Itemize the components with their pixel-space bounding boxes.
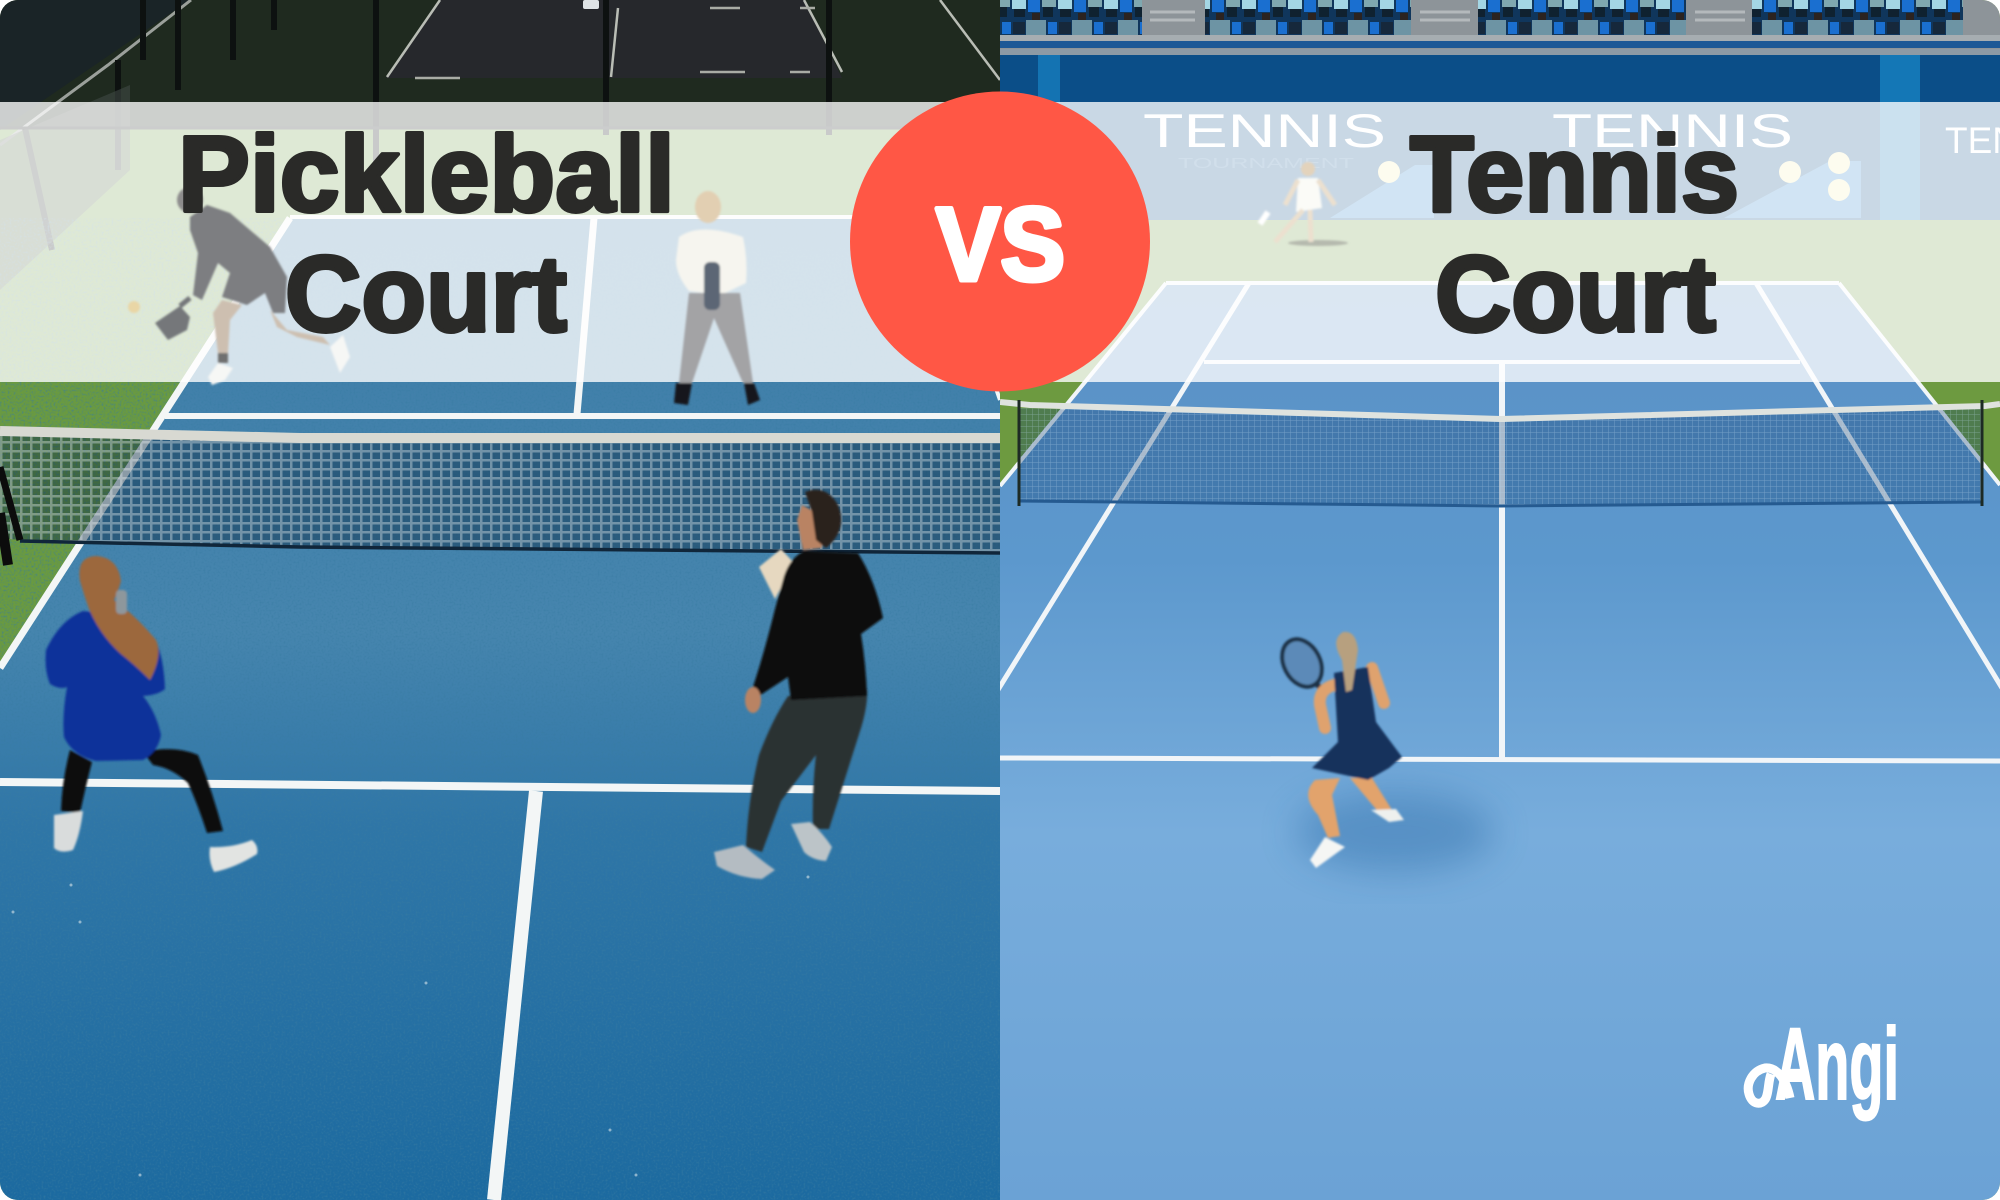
surface specks: [12, 876, 810, 1176]
pickleball net: [0, 431, 1000, 565]
VS badge: [850, 92, 1150, 392]
VS badge: VS: [936, 187, 1065, 303]
Angi logo: Angi: [1775, 1007, 1899, 1121]
far pickleball player bending with paddle: [128, 187, 350, 385]
pickleball court surface: [0, 218, 1000, 1200]
heading: Pickleball Court: [183, 131, 670, 334]
tennis court lines: [996, 283, 2000, 761]
court lines: [0, 217, 1000, 1200]
tournament banner wall: [1000, 55, 2000, 220]
heading: Pickleball Court: Court: [285, 233, 567, 354]
panel: pickleball court photo scene: [0, 0, 1000, 1200]
panel: tennis court photo scene: [996, 0, 2000, 1200]
near tennis player with racket: [1274, 632, 1404, 868]
Angi logo: [1744, 1024, 1896, 1122]
translucent title band: [0, 102, 2000, 382]
heading: Tennis Court: Court: [1435, 233, 1716, 354]
far tennis player in white: [1260, 162, 1348, 246]
far pickleball player standing in white hoodie: [674, 191, 760, 405]
dark background courts behind fence: [0, 0, 1000, 290]
tennis net: [1000, 400, 2000, 506]
heading: Pickleball Court: Pickleball: [178, 113, 675, 234]
tournament banner wall: TOURNAMENT: [1178, 155, 1354, 172]
near player: woman in blue hoodie: [46, 556, 257, 872]
tennis court surface: [1000, 283, 2000, 1200]
heading: Tennis Court: [1409, 131, 1737, 334]
near player: man in black with paddle: [714, 490, 883, 879]
tournament banner wall: TENNIS: [1552, 104, 1793, 157]
stadium stands with spectators: [1000, 0, 2000, 55]
court shadow under player: [1295, 792, 1495, 872]
heading: Tennis Court: Tennis: [1410, 113, 1739, 234]
tournament banner wall: TENNIS: [1143, 104, 1386, 157]
